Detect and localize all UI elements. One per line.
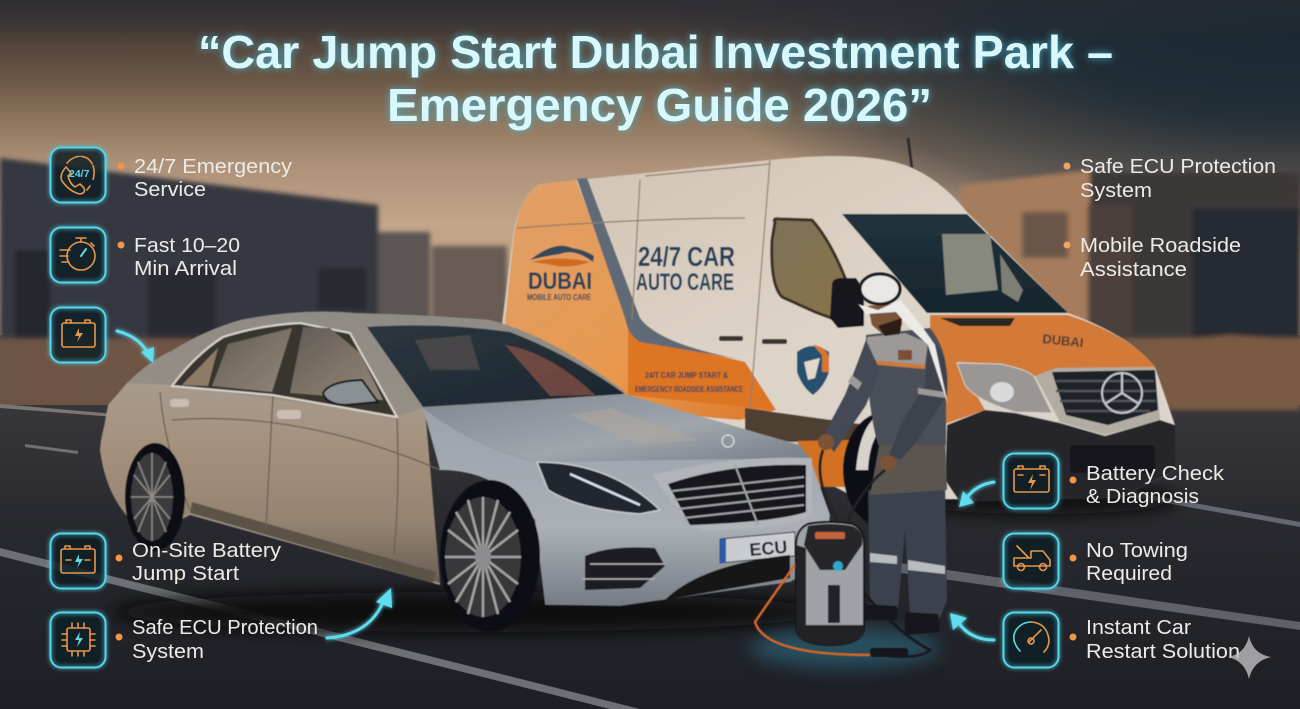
icon: battery bbox=[1014, 466, 1049, 492]
title bbox=[198, 26, 1113, 131]
feature: battery check: & Diagnosis bbox=[1086, 485, 1199, 508]
technician headdress bbox=[858, 300, 948, 405]
icon: tow truck bbox=[1014, 546, 1050, 570]
technician legs bbox=[868, 480, 947, 618]
feature: mobile roadside assistance bbox=[1064, 234, 1241, 281]
car headlight bbox=[537, 462, 660, 514]
van star emblem bbox=[1102, 373, 1142, 413]
car number plate bbox=[720, 532, 795, 563]
car chrome trim bbox=[172, 323, 397, 417]
car door panels bbox=[100, 383, 440, 583]
car lower intake bbox=[585, 547, 665, 590]
feature: instant restart: Instant Car bbox=[1086, 616, 1191, 639]
feature: 24/7 emergency service: 24/7 Emergency bbox=[134, 155, 293, 178]
orange cable bbox=[755, 562, 870, 655]
feature: instant restart: Restart Solution bbox=[1086, 640, 1240, 663]
feature: safe ecu right: System bbox=[1080, 179, 1152, 202]
van text: roadside assistance: EMERGENCY ROADSIDE ASSISTANCE bbox=[635, 385, 743, 394]
van body bbox=[500, 156, 1175, 500]
feature: on-site battery jump start bbox=[50, 534, 282, 588]
van side window bbox=[772, 219, 846, 322]
van front wheel bbox=[843, 412, 927, 528]
feature: 24/7 emergency service: Service bbox=[134, 178, 206, 201]
van hood bbox=[930, 315, 1155, 424]
feature: instant restart bbox=[1004, 612, 1240, 668]
feature: fast arrival: Min Arrival bbox=[134, 257, 237, 280]
van shield badge bbox=[797, 345, 829, 395]
car door handles bbox=[170, 399, 189, 407]
technician chest panel bbox=[867, 333, 928, 365]
van handles bbox=[719, 336, 743, 341]
van text: roadside assistance bbox=[635, 371, 743, 394]
technician hands bbox=[818, 434, 896, 471]
feature: no towing: Required bbox=[1086, 562, 1172, 585]
feature: battery icon with arrow bbox=[50, 308, 154, 363]
car windshield bbox=[367, 325, 625, 407]
feature: safe ecu right bbox=[1064, 155, 1276, 202]
technician arm bbox=[822, 340, 880, 452]
feature: safe ecu left: Safe ECU Protection bbox=[132, 616, 318, 639]
van mirror bbox=[830, 278, 864, 328]
van orange livery bbox=[500, 180, 776, 420]
car rear wheel bbox=[125, 443, 185, 551]
feature: safe ecu right: Safe ECU Protection bbox=[1080, 155, 1276, 178]
feature: mobile roadside assistance: Mobile Roadside bbox=[1080, 234, 1241, 257]
car mirror bbox=[323, 380, 378, 405]
feature: fast arrival: Fast 10–20 bbox=[134, 234, 240, 257]
van rear lower band bbox=[745, 408, 860, 442]
car side windows bbox=[182, 327, 383, 400]
technician torso bbox=[866, 328, 946, 445]
feature: no towing bbox=[1004, 534, 1188, 588]
feature: safe ecu left bbox=[50, 612, 318, 668]
car front wheel bbox=[440, 480, 540, 632]
arrow: to jump starter bbox=[950, 613, 994, 640]
van windshield bbox=[842, 214, 1068, 313]
van bbox=[500, 138, 1175, 528]
arrow: to technician bbox=[959, 482, 994, 507]
feature: battery check bbox=[1004, 454, 1225, 508]
van logo: dubai bbox=[527, 246, 594, 302]
feature: battery check: Battery Check bbox=[1086, 462, 1225, 485]
title: “Car Jump Start Dubai Investment Park – bbox=[198, 26, 1113, 78]
van panel lines bbox=[517, 160, 770, 410]
feature: mobile roadside assistance: Assistance bbox=[1080, 258, 1187, 281]
feature: on-site battery jump start: Jump Start bbox=[132, 562, 239, 585]
feature: on-site battery jump start: On-Site Battery bbox=[132, 539, 282, 562]
car number plate: ECU bbox=[749, 537, 788, 560]
technician face bbox=[868, 303, 902, 336]
feature: fast arrival bbox=[50, 228, 240, 282]
technician boots bbox=[905, 612, 940, 635]
icon: chip bbox=[62, 623, 95, 656]
jump starter bbox=[755, 450, 930, 657]
icon: battery bbox=[61, 546, 95, 573]
car grille bbox=[653, 458, 812, 530]
icon: phone 24/7 bbox=[61, 156, 94, 194]
car body bbox=[100, 312, 625, 585]
icon: gauge bbox=[1014, 622, 1049, 652]
van logo: dubai: MOBILE AUTO CARE bbox=[527, 293, 592, 302]
icon: phone 24/7: 24/7 bbox=[69, 168, 90, 180]
van grille bbox=[1035, 367, 1160, 435]
van headlight bbox=[957, 363, 1052, 413]
cables bbox=[820, 450, 885, 525]
van text: 24/7 car auto care: AUTO CARE bbox=[636, 269, 734, 296]
jump starter body bbox=[796, 522, 864, 645]
feature: safe ecu left: System bbox=[132, 640, 204, 663]
black cable bbox=[863, 592, 930, 657]
car star emblem bbox=[722, 435, 734, 447]
van orange lower panel bbox=[797, 440, 850, 487]
car sill bbox=[190, 502, 436, 583]
icon: battery bbox=[62, 320, 95, 347]
icon: sparkle watermark bbox=[1228, 636, 1271, 679]
van text: 24/7 car auto care bbox=[636, 241, 735, 296]
arrow bbox=[117, 331, 154, 363]
technician bbox=[818, 274, 948, 635]
van text: 24/7 car auto care: 24/7 CAR bbox=[638, 241, 735, 272]
van antenna bbox=[908, 138, 916, 200]
van: DUBAI bbox=[1042, 331, 1084, 350]
car fender and bumper bbox=[423, 408, 830, 606]
van logo: dubai: DUBAI bbox=[528, 268, 592, 295]
car bbox=[100, 312, 830, 632]
arrow: to car bbox=[327, 588, 392, 638]
car hood bbox=[423, 394, 810, 470]
feature: 24/7 emergency service bbox=[50, 148, 293, 202]
title: Emergency Guide 2026” bbox=[387, 79, 932, 131]
van text: roadside assistance: 24/T CAR JUMP START & bbox=[645, 371, 728, 380]
feature: no towing: No Towing bbox=[1086, 539, 1188, 562]
icon: stopwatch bbox=[60, 238, 95, 270]
van bumper bbox=[945, 410, 1175, 502]
